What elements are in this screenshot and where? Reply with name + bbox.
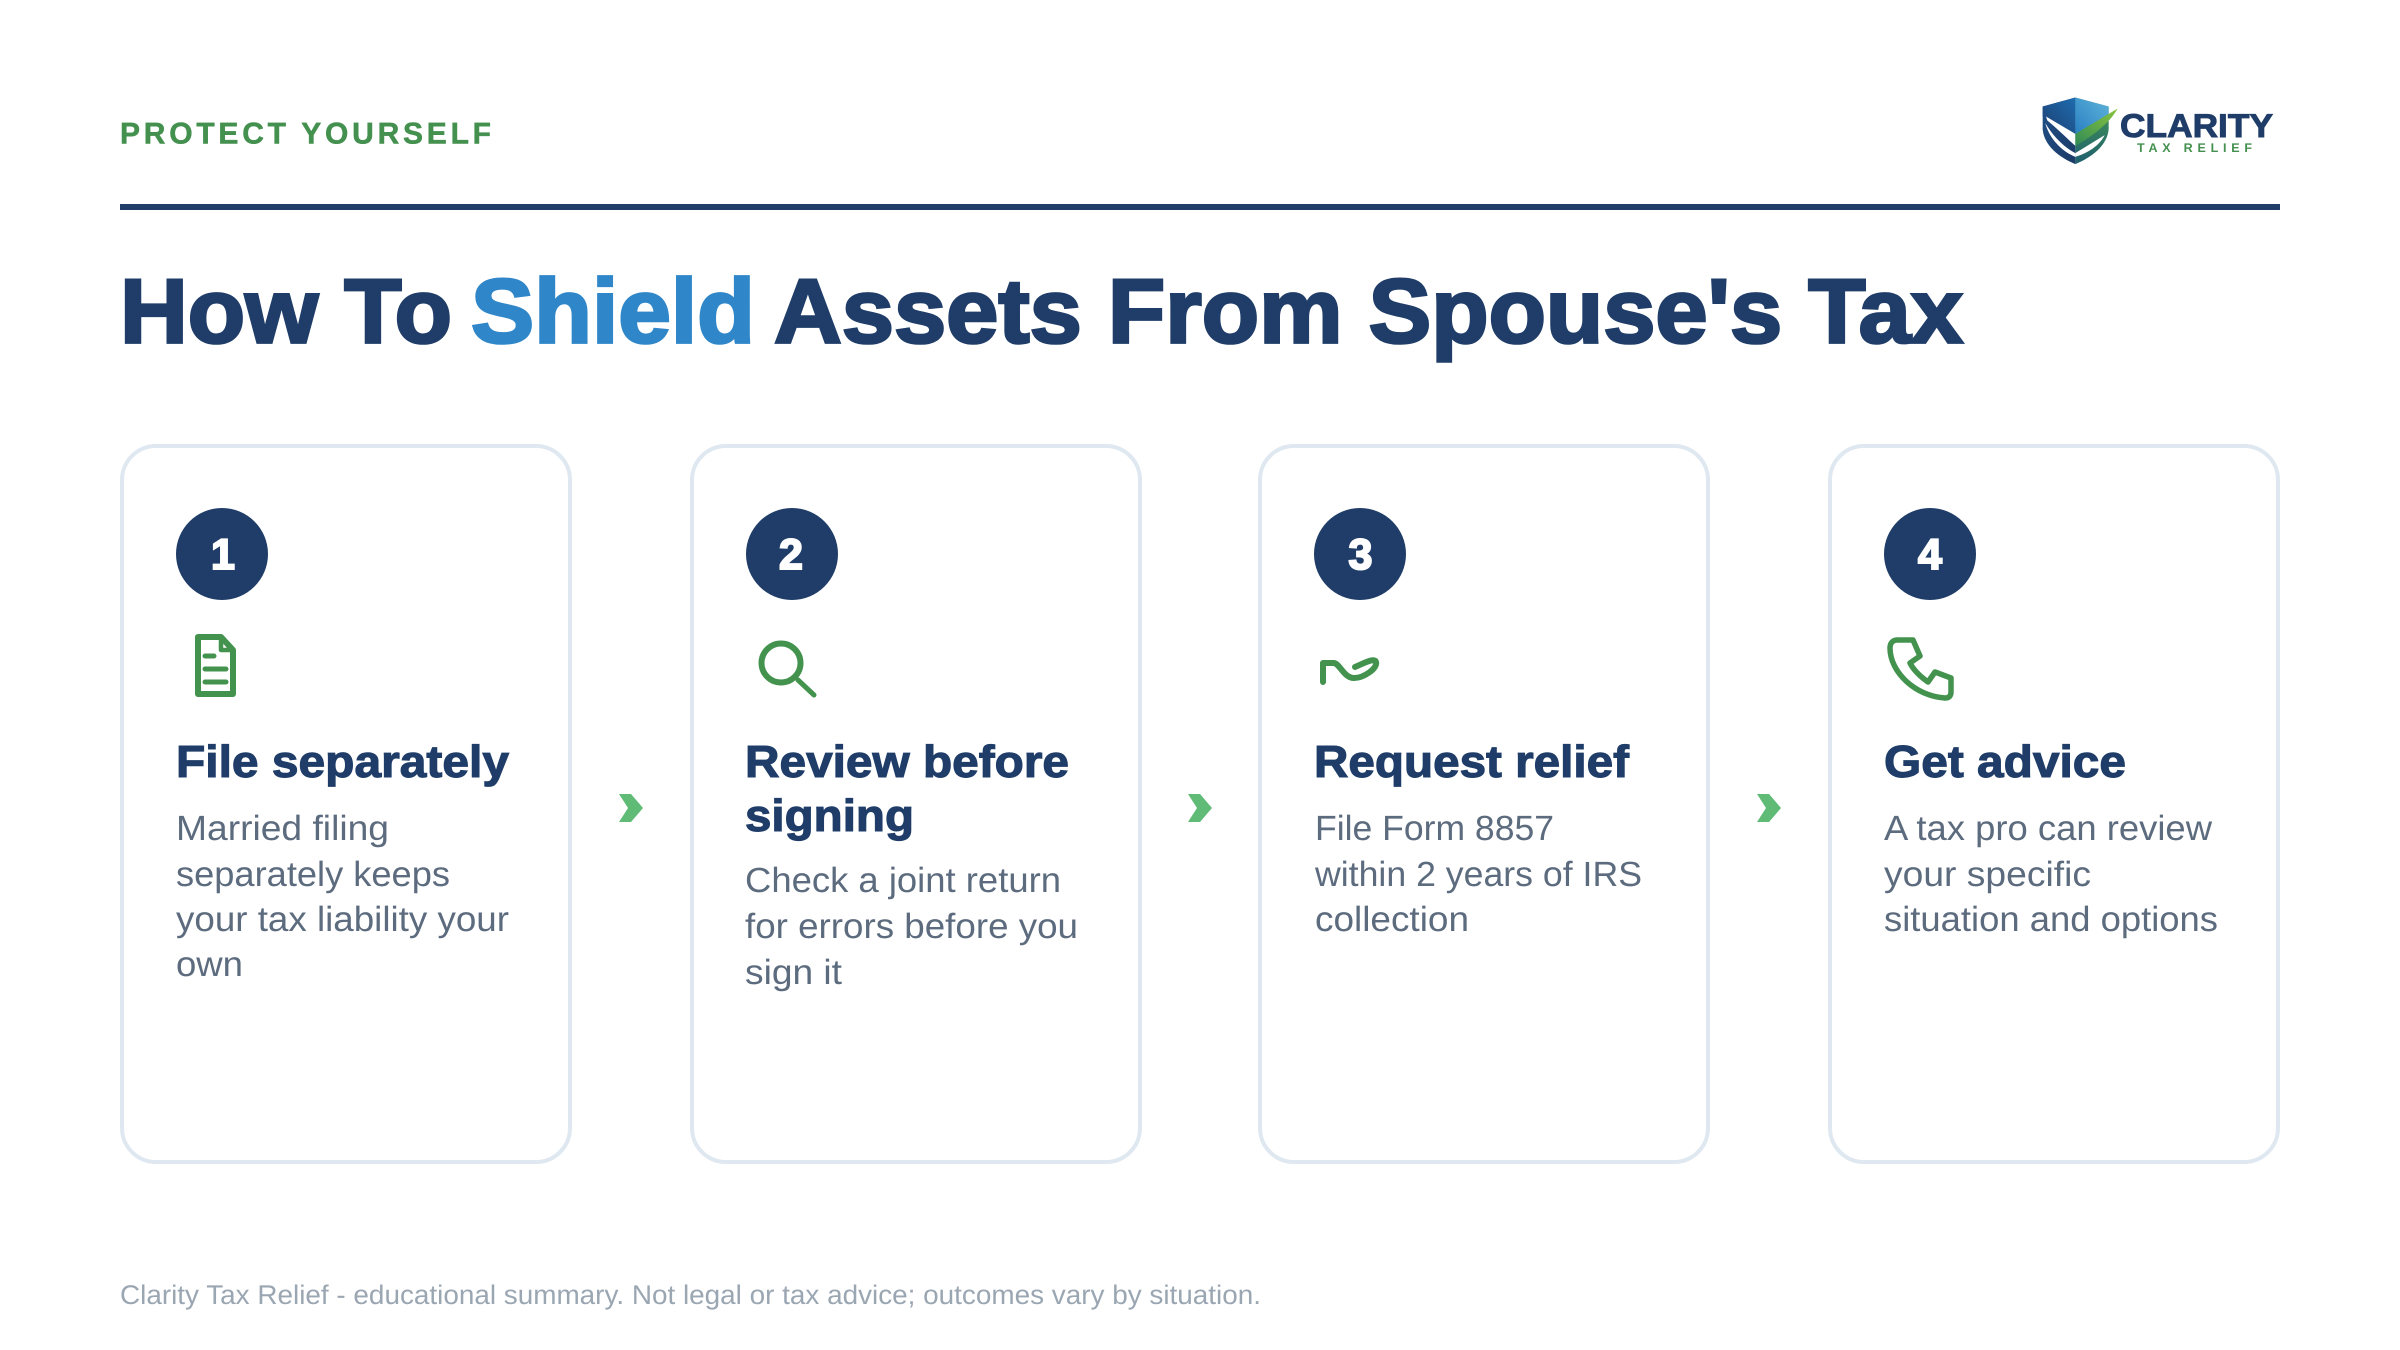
title: How To [120, 262, 452, 362]
step heading [745, 736, 1069, 841]
icon: magnifying glass [762, 644, 814, 695]
step number 1: 1 [211, 531, 235, 579]
arrow 3 [1757, 794, 1781, 822]
step description [1314, 809, 1642, 939]
step heading: Request relief [1314, 736, 1630, 787]
card outline [1830, 446, 2278, 1162]
panel: step 3 [1260, 446, 1708, 1162]
card outline [692, 446, 1140, 1162]
logo tagline: TAX RELIEF [2137, 141, 2252, 155]
card outline [122, 446, 570, 1162]
step description: File Form 8857 [1315, 809, 1554, 848]
panel: step 2 [692, 446, 1140, 1162]
step number 2 [746, 508, 838, 600]
step number 3: 3 [1349, 531, 1372, 579]
eyebrow label: PROTECT YOURSELF [120, 118, 491, 150]
step description [1884, 809, 2218, 939]
icon: telephone [1890, 640, 1951, 698]
header rule [120, 204, 2280, 210]
step description: for errors before you [745, 907, 1078, 946]
step heading: File separately [176, 736, 509, 787]
step description: separately keeps [176, 855, 450, 894]
logo shield icon [2043, 97, 2118, 164]
step description: collection [1315, 900, 1469, 939]
step heading: Review before [745, 736, 1069, 787]
step heading: signing [745, 790, 914, 841]
step description: situation and options [1884, 900, 2218, 939]
step number 3 [1314, 508, 1406, 600]
step description [745, 861, 1078, 992]
logo wordmark: CLARITY [2120, 107, 2273, 144]
step heading: Get advice [1884, 736, 2126, 787]
panel: step 4 [1830, 446, 2278, 1162]
step description: your specific [1884, 855, 2091, 894]
card outline [1260, 446, 1708, 1162]
footer disclaimer: Clarity Tax Relief - educational summary. Not legal or tax advice; outcomes vary by situation. [120, 1280, 1261, 1310]
step description: within 2 years of IRS [1314, 855, 1642, 894]
step description: own [176, 945, 243, 984]
step description: A tax pro can review [1884, 809, 2213, 848]
arrow 1 [619, 794, 643, 822]
step number 1 [176, 508, 268, 600]
step number 2: 2 [779, 531, 803, 579]
step number 4: 4 [1918, 531, 1942, 579]
panel: step 1 [122, 446, 570, 1162]
step description: Married filing [176, 809, 389, 848]
arrow 2 [1188, 794, 1212, 822]
title: Assets From Spouse's Tax [774, 262, 1963, 362]
step description: your tax liability your [176, 900, 509, 939]
step description: Check a joint return [745, 861, 1061, 900]
icon: document [198, 637, 233, 694]
step description: sign it [745, 953, 842, 992]
step description [176, 809, 509, 984]
icon: signature [1323, 660, 1376, 682]
step number 4 [1884, 508, 1976, 600]
title: Shield [471, 262, 755, 362]
title [120, 262, 1963, 362]
logo: Clarity Tax Relief [2043, 97, 2273, 164]
